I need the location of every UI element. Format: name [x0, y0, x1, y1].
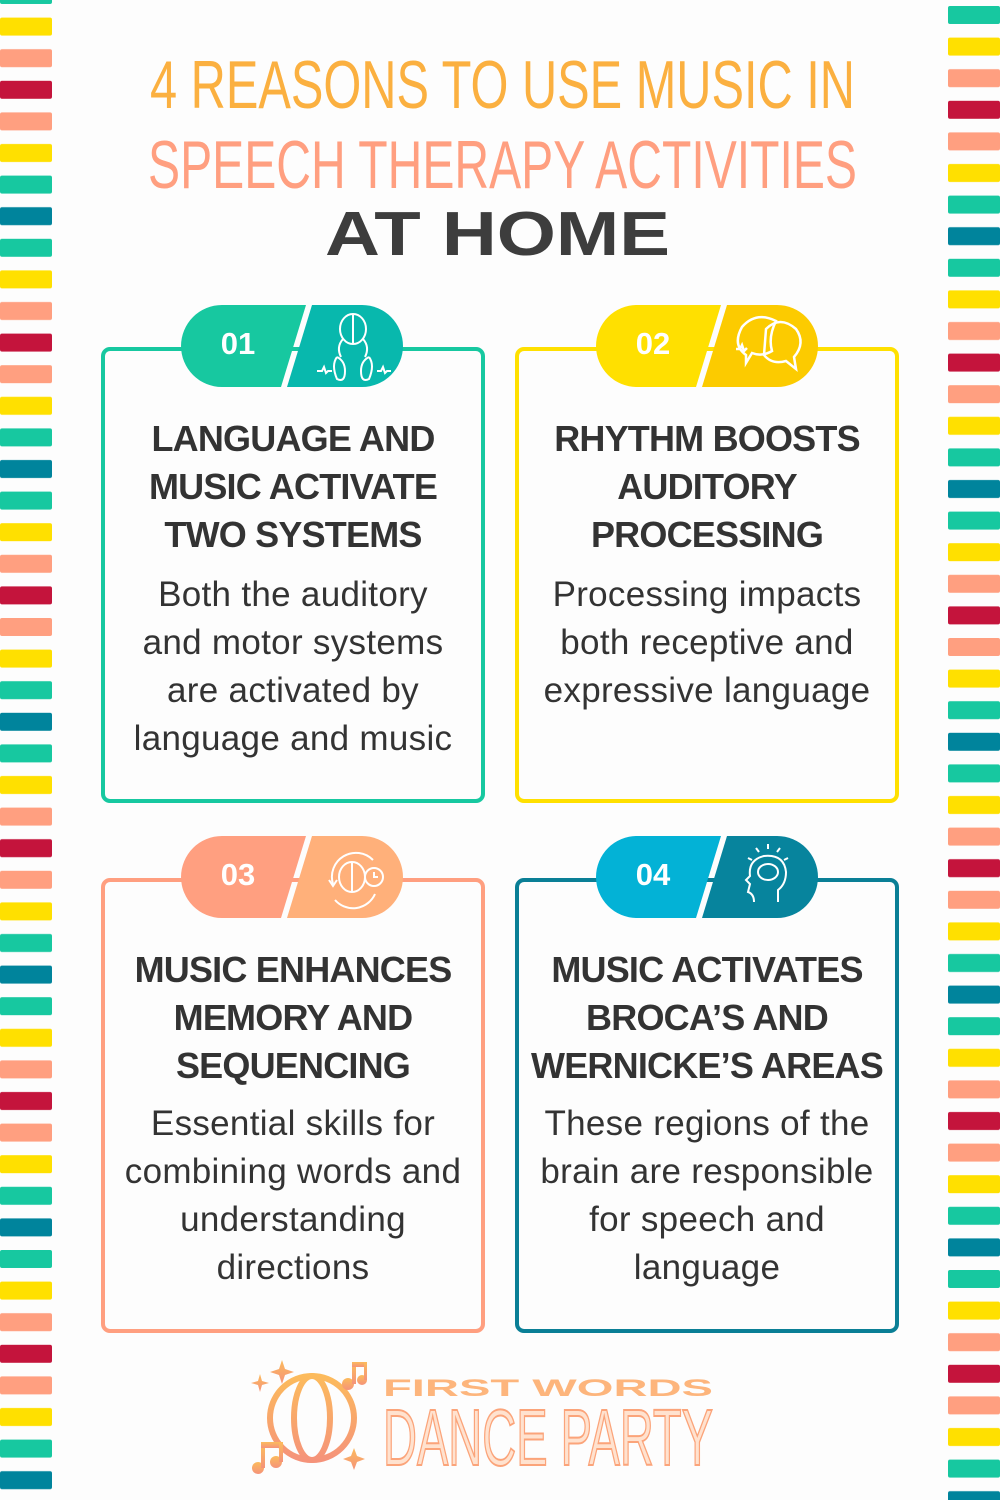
- heading 4: MUSIC ACTIVATES: [551, 949, 863, 990]
- body 4: brain are responsible: [540, 1152, 874, 1191]
- body 3: understanding: [180, 1200, 406, 1239]
- body 4: [540, 1104, 874, 1287]
- badge 01: 01: [221, 326, 255, 361]
- heading 2: PROCESSING: [591, 514, 823, 555]
- body 1: are activated by: [167, 671, 419, 710]
- body 3: combining words and: [125, 1152, 461, 1191]
- body 1: language and music: [134, 719, 452, 758]
- body 2: both receptive and: [560, 623, 854, 662]
- badge 03: 03: [221, 857, 255, 892]
- body 1: Both the auditory: [158, 575, 428, 614]
- body 3: directions: [217, 1248, 369, 1287]
- badge 03: [181, 836, 403, 918]
- heading 3: SEQUENCING: [176, 1045, 410, 1086]
- heading 1: [149, 418, 437, 555]
- badge 04: 04: [636, 857, 671, 892]
- icon: disco globe: [270, 1358, 354, 1460]
- heading 1: MUSIC ACTIVATE: [149, 466, 437, 507]
- badge 04: [596, 836, 818, 918]
- heading 2: RHYTHM BOOSTS: [554, 418, 860, 459]
- decorative stripes: right: [948, 6, 1000, 1500]
- body 4: These regions of the: [544, 1104, 870, 1143]
- icon: speech bubbles with head: [736, 317, 801, 369]
- panel: card 3: [101, 878, 485, 1333]
- decorative stripes: left: [0, 0, 52, 1490]
- heading 1: TWO SYSTEMS: [164, 514, 422, 555]
- title: [148, 47, 857, 269]
- heading 2: [554, 418, 860, 555]
- logo: first words dance party: [251, 1360, 713, 1480]
- body 4: for speech and: [589, 1200, 825, 1239]
- panel: card 1: [101, 347, 485, 803]
- body 2: expressive language: [544, 671, 870, 710]
- heading 4: [531, 949, 883, 1086]
- panel: card 4: [515, 878, 899, 1333]
- badge 02: [596, 305, 818, 387]
- body 3: [125, 1104, 461, 1287]
- heading 4: WERNICKE’S AREAS: [531, 1045, 883, 1086]
- badge 02: 02: [636, 326, 670, 361]
- heading 3: MEMORY AND: [174, 997, 412, 1038]
- body 2: [544, 575, 870, 710]
- heading 4: BROCA’S AND: [586, 997, 828, 1038]
- panel: card 2: [515, 347, 899, 803]
- logo: first words dance party: FIRST WORDS: [383, 1375, 713, 1402]
- heading 3: [135, 949, 451, 1086]
- body 2: Processing impacts: [553, 575, 861, 614]
- icon: brain with clock: [329, 853, 383, 908]
- title: AT HOME: [325, 200, 670, 269]
- body 1: [134, 575, 452, 758]
- body 3: Essential skills for: [151, 1104, 435, 1143]
- icon: head with brain: [746, 844, 788, 902]
- badge 01: [181, 305, 403, 387]
- icon: brain with ears: [317, 314, 391, 380]
- heading 3: MUSIC ENHANCES: [135, 949, 451, 990]
- heading 2: AUDITORY: [617, 466, 797, 507]
- body 4: language: [634, 1248, 780, 1287]
- heading 1: LANGUAGE AND: [151, 418, 435, 459]
- body 1: and motor systems: [143, 623, 443, 662]
